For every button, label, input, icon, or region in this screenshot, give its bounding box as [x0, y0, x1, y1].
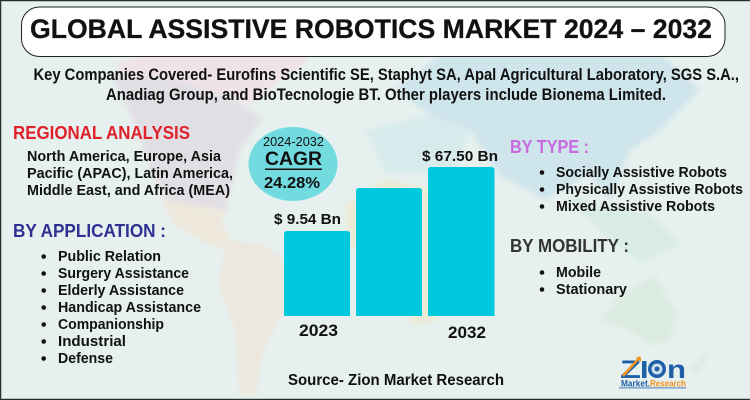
panel: by type: BY TYPE :	[510, 136, 589, 157]
title: GLOBAL ASSISTIVE ROBOTICS MARKET 2024 – 2032	[30, 14, 712, 44]
bar chart: 2032	[448, 324, 486, 342]
title	[22, 7, 725, 56]
panel: by application: BY APPLICATION :	[13, 220, 166, 241]
icon: Zion Market Research logo: n	[667, 356, 686, 384]
callout: CAGR	[248, 127, 338, 201]
key companies text	[34, 66, 739, 104]
background world map	[112, 40, 707, 395]
panel: by application: Handicap Assistance	[58, 300, 201, 316]
callout: CAGR: 2024-2032	[263, 134, 324, 149]
panel: by application: Companionship	[58, 317, 164, 333]
panel: by mobility: Stationary	[556, 282, 627, 298]
panel: by mobility	[510, 235, 629, 298]
callout: CAGR: CAGR	[265, 149, 322, 170]
panel: by application	[13, 220, 201, 367]
panel: by type: Mixed Assistive Robots	[556, 199, 715, 215]
icon: Zion Market Research logo: Z	[620, 356, 641, 384]
panel: regional analysis: Pacific (APAC), Latin America,	[27, 166, 233, 182]
icon: Zion Market Research logo	[619, 356, 686, 390]
panel: regional analysis	[13, 122, 233, 199]
panel: regional analysis: REGIONAL ANALYSIS	[13, 122, 190, 143]
key companies text: Anadiag Group, and BioTecnologie BT. Other players include Bionema Limited.	[106, 86, 666, 104]
panel: by mobility: Mobile	[556, 265, 601, 281]
bar chart	[274, 148, 498, 342]
source text: Source- Zion Market Research	[288, 372, 504, 389]
panel: by type: Socially Assistive Robots	[556, 165, 727, 181]
panel: by type	[510, 136, 743, 215]
panel: by application: Defense	[58, 351, 113, 367]
icon: Zion Market Research logo: Market.	[621, 378, 650, 390]
callout: CAGR: 24.28%	[264, 175, 320, 192]
panel: regional analysis: Middle East, and Africa (MEA)	[27, 183, 230, 199]
icon: Zion Market Research logo: Research	[650, 378, 686, 390]
panel: by application: Surgery Assistance	[58, 266, 189, 282]
panel: by application: Industrial	[58, 334, 126, 350]
panel: by application: Public Relation	[58, 249, 161, 265]
panel: regional analysis: North America, Europe, Asia	[27, 149, 222, 165]
panel: by mobility: BY MOBILITY :	[510, 235, 629, 256]
panel: by type: Physically Assistive Robots	[556, 182, 743, 198]
bar chart: $ 67.50 Bn	[422, 148, 498, 165]
bar chart: $ 9.54 Bn	[274, 211, 341, 228]
panel: by application: Elderly Assistance	[58, 283, 184, 299]
bar chart: 2023	[299, 322, 338, 340]
